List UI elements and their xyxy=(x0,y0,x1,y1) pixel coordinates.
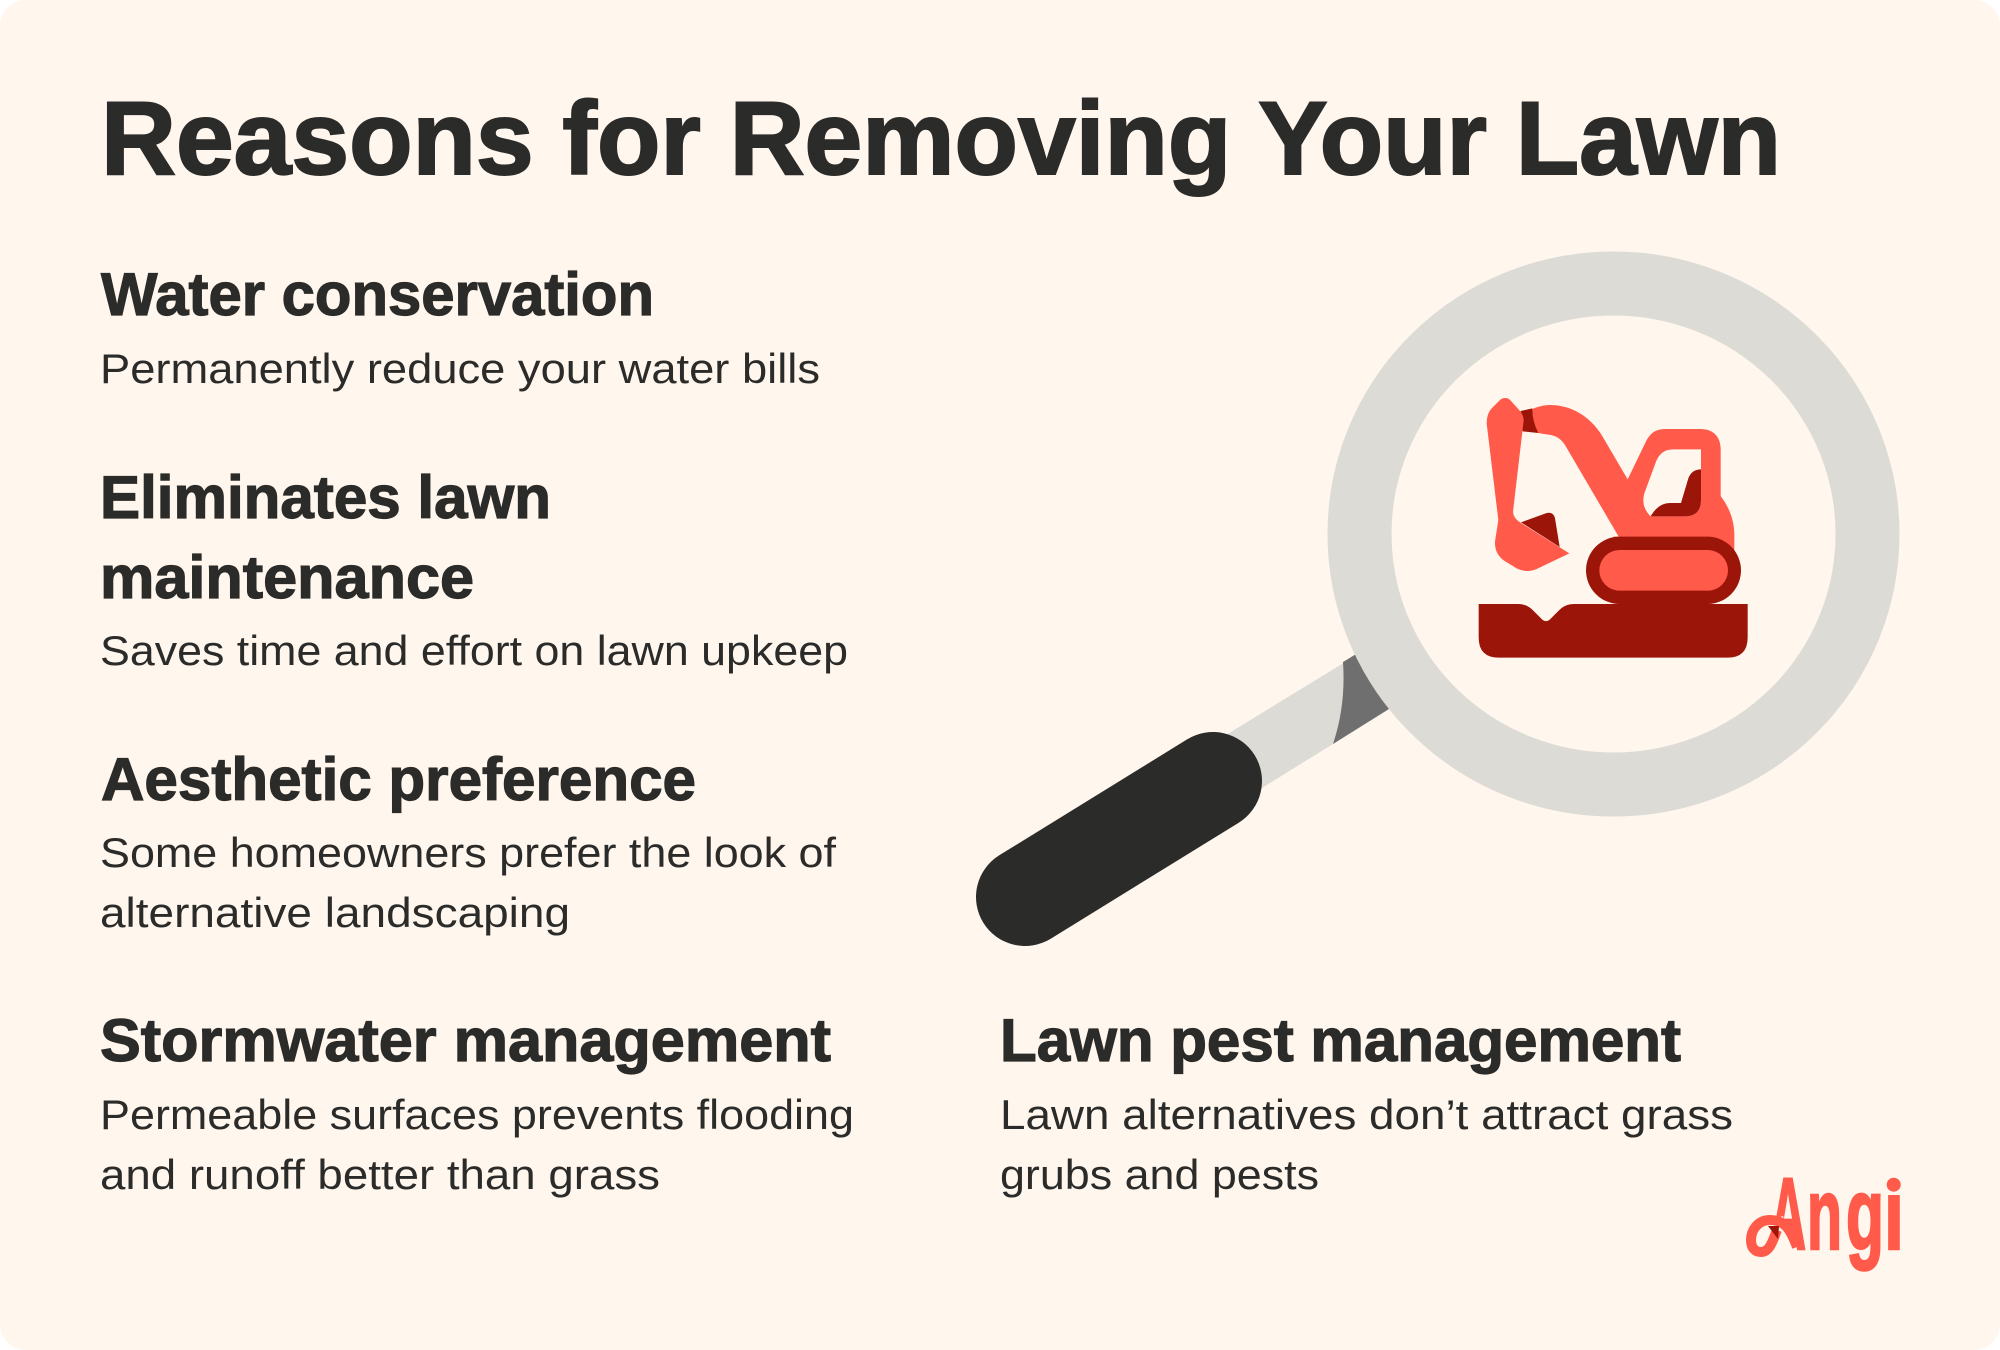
heading: eliminates lawn maintenance: Eliminates lawn xyxy=(100,464,551,531)
description: lawn pest management: grubs and pests xyxy=(1000,1151,1319,1198)
magnifier grip xyxy=(1025,781,1213,897)
excavator body and boom xyxy=(1532,405,1734,560)
logo wordmark: n xyxy=(1807,1157,1842,1271)
description: stormwater management: and runoff better than grass xyxy=(100,1151,660,1198)
logo i dot xyxy=(1887,1178,1901,1192)
reason: water conservation xyxy=(100,261,820,392)
reason: aesthetic preference xyxy=(100,746,836,936)
logo i dot mask xyxy=(1884,1170,1904,1195)
boom joint xyxy=(1521,408,1538,433)
logo wordmark: i xyxy=(1884,1157,1904,1271)
icon: excavator on ground xyxy=(1479,398,1748,658)
description: aesthetic preference: alternative landscaping xyxy=(100,889,570,936)
reason: lawn pest management xyxy=(1000,1007,1733,1198)
heading: stormwater management: Stormwater management xyxy=(100,1007,831,1074)
magnifier shaft shadow xyxy=(1333,648,1400,744)
description: eliminates lawn maintenance: Saves time and effort on lawn upkeep xyxy=(100,627,848,674)
heading: lawn pest management: Lawn pest management xyxy=(1000,1007,1681,1074)
title: Reasons for Removing Your Lawn xyxy=(101,81,1781,197)
reason: stormwater management xyxy=(100,1007,854,1198)
magnifier lens ring xyxy=(1360,284,1868,784)
logo wordmark: A xyxy=(1770,1157,1806,1271)
heading: aesthetic preference: Aesthetic preference xyxy=(101,746,696,813)
description: lawn pest management: Lawn alternatives don’t attract grass xyxy=(1000,1091,1733,1138)
reason: eliminates lawn maintenance xyxy=(100,464,848,674)
logo: Angi xyxy=(1751,1157,1904,1271)
excavator arm and bucket xyxy=(1487,398,1569,571)
heading: eliminates lawn maintenance: maintenance xyxy=(100,544,474,611)
operator seat xyxy=(1651,469,1701,516)
description: stormwater management: Permeable surfaces prevents flooding xyxy=(100,1091,854,1138)
logo wordmark: g xyxy=(1846,1157,1884,1271)
logo swash fold xyxy=(1768,1226,1779,1239)
logo A left leg mask xyxy=(1765,1216,1793,1252)
cab window xyxy=(1643,449,1701,516)
logo swash xyxy=(1751,1220,1797,1252)
description: water conservation: Permanently reduce your water bills xyxy=(100,345,820,392)
ground xyxy=(1479,604,1748,658)
magnifier shaft xyxy=(1190,656,1388,812)
description: aesthetic preference: Some homeowners prefer the look of xyxy=(100,829,836,876)
track outer xyxy=(1586,537,1741,604)
heading: water conservation: Water conservation xyxy=(101,261,654,328)
track inner xyxy=(1599,550,1728,591)
bucket inner xyxy=(1521,513,1560,547)
icon: magnifying glass xyxy=(1025,284,1868,897)
